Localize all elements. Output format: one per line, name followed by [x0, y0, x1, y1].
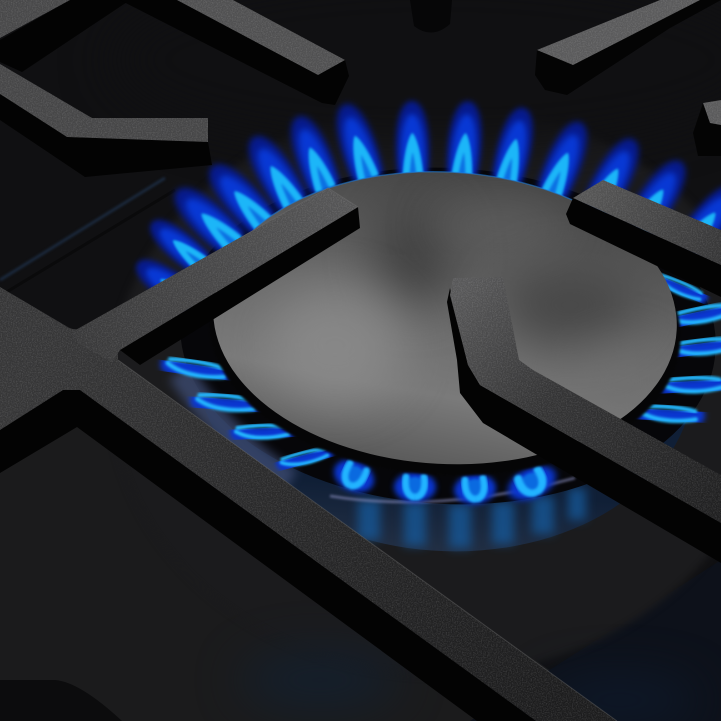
grate: bent left finger [0, 64, 212, 177]
flames: upper arc [129, 99, 721, 313]
grate: top-left corner bar [0, 0, 130, 72]
dark rim under cap [202, 171, 688, 487]
grate: underside shadows of main cross [0, 207, 536, 721]
grate: highlight along edges [118, 188, 617, 721]
burner base ring [172, 154, 721, 568]
grate: crossing bar [72, 188, 358, 362]
flames: lower arc [166, 358, 561, 507]
flames: right side [638, 274, 721, 422]
grate: small right stub [693, 100, 721, 156]
grate: long diagonal bar [0, 287, 617, 721]
ring of blue flames [129, 99, 721, 507]
grate: centre bent finger [447, 277, 721, 563]
blue flame reflections on base [358, 488, 586, 548]
grate: right finger [566, 180, 721, 297]
grate: second top-left bar [120, 0, 349, 105]
burner cap [214, 171, 677, 464]
knob shadow at top [410, 0, 452, 33]
bottom-left recess [0, 680, 122, 721]
cap reflections [268, 208, 646, 414]
grate: top-right bar [535, 0, 721, 95]
